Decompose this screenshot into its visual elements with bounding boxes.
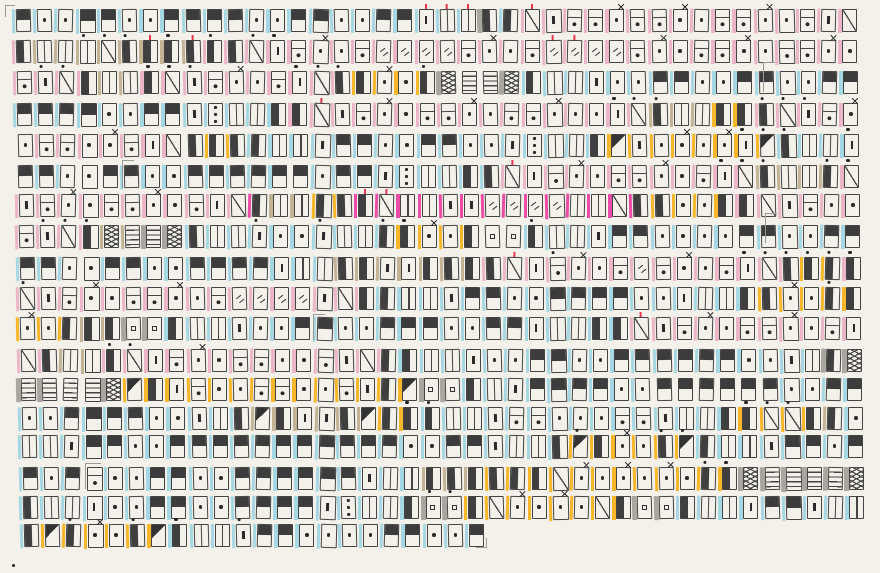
row 3 of glyphs [12,64,858,96]
row 8 of glyphs [14,218,860,250]
row 11 of glyphs [16,312,861,342]
row 17 of glyphs [18,490,864,522]
mark: pencil dot bottom left [12,564,15,567]
row 4 of glyphs [12,97,858,128]
row 18 of glyphs [20,518,484,549]
row 16 of glyphs [18,460,864,492]
row 15 of glyphs [18,428,863,460]
row 14 of glyphs [18,401,863,432]
row 1 of glyphs [12,4,857,34]
bracket: end corner bottom right [476,538,487,548]
bracket: row 11 upper corner [313,314,325,340]
bracket: row 8 upper corner [765,213,777,243]
row 10 of glyphs [16,280,861,312]
bracket: start corner top left [5,5,15,17]
row 6 of glyphs [18,158,859,190]
bracket: row 16 upper corner [85,463,101,489]
row 5 of glyphs [18,128,859,160]
bracket: row 3 upper corner [763,62,775,92]
row 7 of glyphs [14,189,860,220]
row 9 of glyphs [16,250,861,282]
row 2 of glyphs [12,34,857,66]
row 12 of glyphs [16,343,862,374]
bracket: row 6 upper corner [122,160,134,188]
row 13 of glyphs [16,378,862,404]
